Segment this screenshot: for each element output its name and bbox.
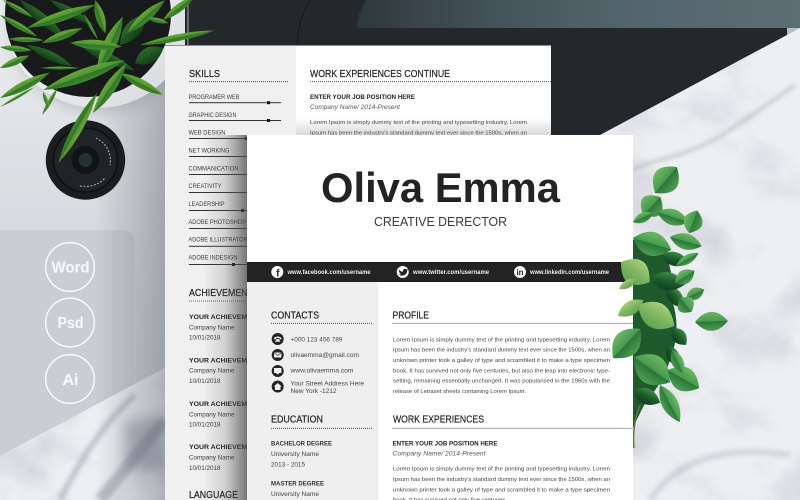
format badge: Psd: Psd bbox=[58, 315, 84, 332]
contacts section bbox=[271, 309, 372, 395]
contacts section: olivaemma@gmail.com bbox=[290, 352, 359, 359]
skills section bbox=[188, 68, 289, 266]
format badge: Ai: Ai bbox=[62, 372, 78, 389]
education section bbox=[271, 414, 372, 498]
work experiences continue section: Lorem Ipsum is simply dummy text of the printing and typesetting industry. Lorem bbox=[310, 120, 527, 126]
icon: facebook: f bbox=[276, 268, 280, 280]
work experiences section: Ipsum has been the industry's standard dummy text ever since the 1500s, when an bbox=[393, 477, 610, 483]
work experiences continue section: WORK EXPERIENCES CONTINUE bbox=[310, 68, 450, 80]
achievements section: 10/01/2018 bbox=[189, 465, 221, 472]
dark folder panel bbox=[185, 0, 800, 300]
education section: MASTER DEGREE bbox=[271, 481, 324, 488]
profile section: book. It has survived not only five centuries, but also the leap into electronic type- bbox=[393, 368, 610, 374]
work experiences continue section: ENTER YOUR JOB POSITION HERE bbox=[310, 94, 416, 101]
achievements section: YOUR ACHIEVEMENT bbox=[189, 401, 261, 408]
back resume page bbox=[165, 45, 551, 500]
front resume page bbox=[247, 135, 633, 500]
profile section: setting, remaining essentially unchanged. It was popularised in the 1960s with the bbox=[393, 379, 610, 385]
achievements section: ACHIEVEMENTS bbox=[189, 287, 259, 299]
achievements section: Company Name bbox=[189, 368, 235, 375]
skills section: NET WORKING bbox=[188, 148, 230, 154]
tablet surface bbox=[0, 230, 135, 500]
icon: monitor bbox=[272, 365, 284, 377]
skills section: WEB DESIGN bbox=[188, 130, 226, 137]
profile section: release of Letraset sheets containing Lorem Ipsum. bbox=[393, 389, 526, 395]
skills section: ADOBE INDESIGN bbox=[188, 254, 238, 262]
white plant pot with soil bbox=[5, 0, 195, 113]
education section: University Name bbox=[271, 491, 319, 498]
education section: University Name bbox=[271, 451, 319, 458]
name title: Oliva Emma bbox=[321, 164, 561, 211]
skills section: COMMANICATION bbox=[188, 165, 239, 172]
right plant foliage behind page bbox=[625, 159, 728, 448]
achievements section: 10/01/2018 bbox=[189, 422, 221, 429]
education section: BACHELOR DEGREE bbox=[271, 441, 332, 448]
work experiences section: WORK EXPERIENCES bbox=[393, 414, 484, 426]
achievements section: 10/01/2018 bbox=[189, 335, 221, 342]
profile section: Lorem Ipsum is simply dummy text of the printing and typesetting industry. Lorem bbox=[393, 337, 610, 343]
achievements section: YOUR ACHIEVEMENT bbox=[189, 358, 261, 364]
left column background bbox=[247, 282, 378, 500]
work experiences continue section: Ipsum has been the industry's standard dummy text ever since the 1500s, when an bbox=[310, 130, 527, 136]
right plant leaves over page bbox=[603, 251, 681, 367]
work experiences continue section: Company Name/ 2014-Present bbox=[310, 104, 401, 111]
skills section: GRAPHIC DESIGN bbox=[188, 112, 237, 119]
skills section: ADOBE PHOTOSHOP bbox=[188, 219, 246, 226]
skills section: LEADERSHIP bbox=[188, 201, 224, 208]
format badge: Psd bbox=[46, 298, 94, 347]
skills section: PROGRAMER WEB bbox=[188, 94, 240, 101]
contacts section: www.olivaemma.com bbox=[289, 368, 354, 374]
profile section: unknown printer took a galley of type and scrambled it to make a type specimen bbox=[393, 358, 610, 364]
icon: email bbox=[272, 349, 284, 361]
social media band bbox=[247, 262, 633, 282]
work experiences continue section bbox=[310, 68, 551, 136]
achievements section: Company Name bbox=[189, 324, 235, 331]
format badge: Ai bbox=[46, 355, 94, 403]
icon: facebook bbox=[271, 266, 283, 280]
icon: linkedin: in bbox=[516, 268, 524, 277]
achievements section: 10/01/2018 bbox=[189, 378, 221, 385]
icon: phone bbox=[272, 333, 284, 345]
icon: camera lens bbox=[46, 120, 125, 200]
achievements section: YOUR ACHIEVEMENT bbox=[189, 444, 261, 451]
education section: EDUCATION bbox=[271, 414, 323, 426]
contacts section: New York -1212 bbox=[290, 388, 337, 395]
contacts section: Your Street Address Here bbox=[290, 380, 364, 388]
social media band: www.facebook.com/username bbox=[287, 269, 371, 276]
format badge: Word: Word bbox=[52, 260, 90, 276]
icon: twitter bbox=[397, 266, 409, 278]
icon: home bbox=[272, 380, 284, 392]
work experiences section bbox=[392, 414, 633, 500]
work experiences section: unknown printer took a galley of type and scrambled it to make a type specimen bbox=[393, 487, 610, 493]
achievements section: Company Name bbox=[189, 411, 235, 418]
format badge: Word bbox=[46, 243, 94, 291]
skills section: CREATIVITY bbox=[188, 183, 222, 190]
skills section: SKILLS bbox=[189, 68, 220, 80]
page cast shadow on desk bbox=[95, 45, 165, 500]
contacts section: CONTACTS bbox=[271, 309, 319, 321]
education section: 2013 - 2015 bbox=[271, 461, 305, 468]
achievements section bbox=[189, 287, 289, 472]
top-left plant bbox=[0, 0, 215, 165]
social media band: www.twitter.com/username bbox=[412, 269, 490, 276]
achievements section: YOUR ACHIEVEMENT bbox=[189, 314, 261, 321]
profile section: Ipsum has been the industry's standard dummy text ever since the 1500s, when an bbox=[393, 348, 610, 354]
achievements section: Company Name bbox=[189, 455, 235, 462]
profile section: PROFILE bbox=[392, 309, 429, 321]
contacts section: +000 123 456 789 bbox=[290, 336, 343, 343]
work experiences section: Lorem Ipsum is simply dummy text of the printing and typesetting industry. Lorem bbox=[393, 467, 610, 473]
front page shadow on back page bbox=[203, 118, 551, 500]
work experiences section: ENTER YOUR JOB POSITION HERE bbox=[392, 441, 498, 448]
icon: linkedin bbox=[514, 266, 526, 278]
profile section bbox=[392, 309, 633, 395]
job subtitle: CREATIVE DERECTOR bbox=[374, 214, 507, 229]
work experiences section: Company Name/ 2014-Present bbox=[392, 451, 487, 458]
social media band: www.linkedin.com/username bbox=[529, 269, 610, 276]
skills section: ADOBE ILLUSTRATOR bbox=[188, 237, 248, 244]
